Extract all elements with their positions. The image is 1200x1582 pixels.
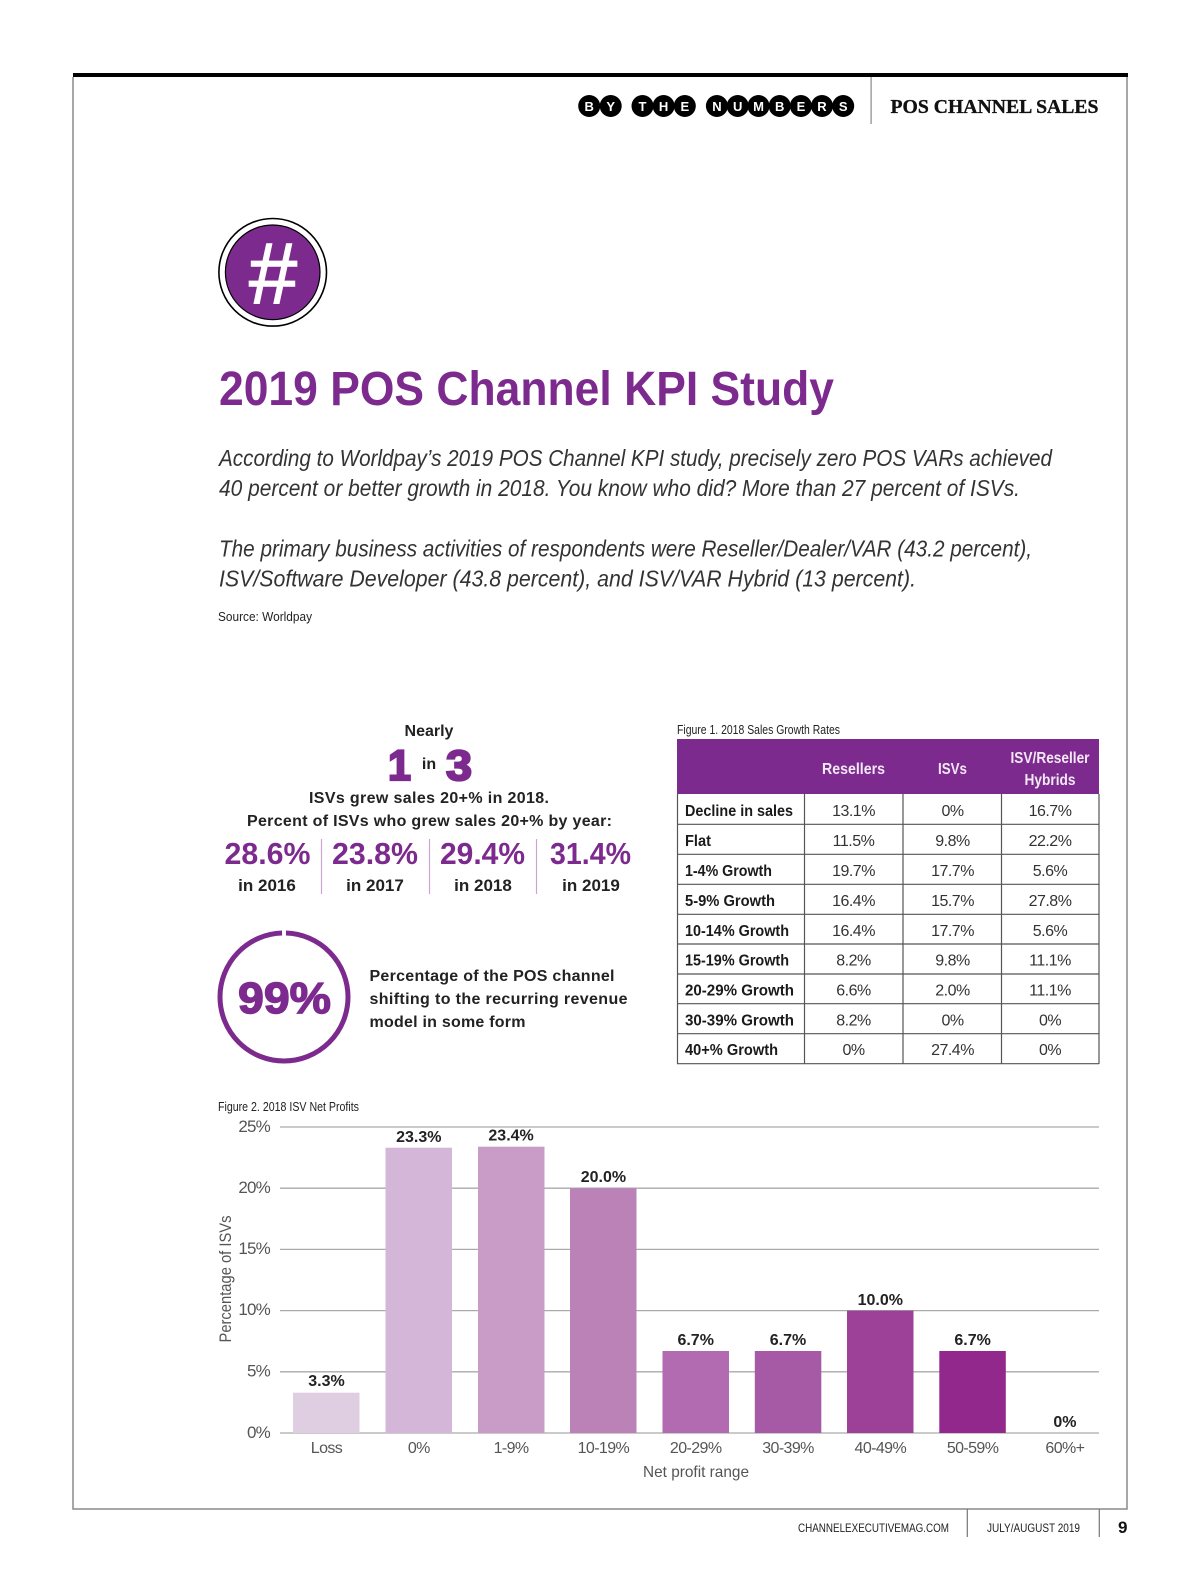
bar: 60%+: 60%+	[1045, 1440, 1085, 1457]
x axis title: Net profit range	[643, 1464, 749, 1481]
row: decline in sales	[685, 803, 1072, 820]
stat: 2016	[224, 836, 310, 895]
header: by the numbers badge row: H	[659, 99, 668, 114]
intro paragraph 2: ISV/Software Developer (43.8 percent), and ISV/VAR Hybrid (13 percent).	[219, 566, 916, 592]
row: 40+% growth: 0%	[842, 1042, 865, 1059]
bar: 10-19%: 20.0%	[581, 1169, 626, 1186]
table: sales growth rates	[677, 739, 1099, 1064]
text: ISV growth statement: Percent of ISVs who grew sales 20+% by year:	[247, 813, 612, 830]
row: 15-19% growth: 15-19% Growth	[685, 952, 789, 970]
bar: 1-9%: 1-9%	[494, 1440, 529, 1457]
header: by the numbers badge row: Y	[606, 99, 615, 114]
ring caption: shifting to the recurring revenue	[370, 991, 628, 1008]
intro paragraph 2: The primary business activities of respondents were Reseller/Dealer/VAR (43.2 percent),	[219, 536, 1032, 562]
row: 20-29% growth: 11.1%	[1029, 982, 1071, 1000]
header: by the numbers badge row: E	[680, 99, 689, 114]
panel: 99 percent ring stat	[220, 933, 628, 1061]
table header: Resellers	[822, 761, 885, 778]
row: 1-4% growth	[685, 863, 1068, 880]
table header: Hybrids	[1024, 772, 1076, 789]
stat: 2016: 28.6%	[224, 836, 310, 871]
bar: 10-19%: 10-19%	[578, 1440, 630, 1457]
bar: 60%+: 0%	[1053, 1414, 1076, 1431]
stat: 2017	[332, 836, 418, 895]
bar: 30-39%	[755, 1332, 821, 1457]
footer: page number: 9	[1118, 1518, 1127, 1537]
y axis labels: 5%	[247, 1362, 271, 1380]
row: decline in sales: Decline in sales	[685, 803, 793, 820]
bar: 20-29%	[662, 1332, 729, 1457]
bar: 0%: 23.3%	[396, 1129, 441, 1146]
y axis labels: 15%	[238, 1239, 271, 1258]
icon: hash badge	[219, 218, 326, 326]
footer: website: CHANNELEXECUTIVEMAG.COM	[798, 1521, 949, 1535]
bar: 50-59%	[939, 1332, 1006, 1457]
y axis labels	[238, 1117, 271, 1442]
y axis labels: 0%	[247, 1423, 271, 1442]
header: by the numbers badge row: B	[775, 99, 784, 114]
row: flat	[685, 833, 1072, 850]
bar: 40-49%: 40-49%	[855, 1440, 906, 1457]
panel: yearly percentages	[224, 836, 631, 895]
row: 5-9% growth: 5-9% Growth	[685, 893, 775, 910]
bar: 50-59%: 50-59%	[947, 1440, 999, 1457]
big stat: 1 in 3: in	[422, 756, 436, 773]
bar: 30-39%: 30-39%	[762, 1440, 814, 1457]
bar: 20-29%: 20-29%	[670, 1440, 722, 1457]
bar chart: ISV net profits	[216, 1117, 1099, 1481]
row: flat: 11.5%	[833, 833, 875, 850]
row: decline in sales: 13.1%	[832, 803, 875, 820]
bar: 40-49%	[847, 1292, 914, 1457]
row: 5-9% growth	[685, 893, 1072, 910]
header divider	[870, 77, 872, 124]
title: 2019 POS Channel KPI Study	[219, 363, 834, 416]
bar: 60%+	[1045, 1414, 1085, 1457]
row: 1-4% growth: 19.7%	[832, 863, 875, 880]
header: by the numbers badge row: B	[585, 99, 594, 114]
header: by the numbers badge row: T	[639, 99, 647, 114]
bar: loss	[293, 1373, 360, 1457]
stat: 2017: in 2017	[346, 876, 404, 895]
footer: issue date: JULY/AUGUST 2019	[987, 1521, 1080, 1535]
ring value: 99%	[238, 974, 331, 1023]
row: 10-14% growth: 17.7%	[931, 923, 974, 940]
header: by the numbers badge row: E	[797, 99, 806, 114]
panel: nearly 1 in 3 stat	[247, 723, 612, 830]
icon: hash badge: #	[249, 226, 297, 322]
row: 10-14% growth: 5.6%	[1033, 923, 1068, 940]
header: by the numbers badge row: S	[839, 99, 848, 114]
row: 1-4% growth: 17.7%	[931, 863, 974, 880]
intro paragraph 2	[219, 536, 1032, 592]
row: 15-19% growth: 11.1%	[1029, 952, 1071, 970]
stat: 2019: in 2019	[562, 876, 620, 895]
row: 20-29% growth: 6.6%	[836, 982, 871, 1000]
header: section name: POS CHANNEL SALES	[890, 96, 1098, 118]
y axis labels: 25%	[238, 1117, 271, 1136]
row: 1-4% growth: 1-4% Growth	[685, 863, 772, 880]
table header: ISVs	[938, 761, 967, 778]
header: by the numbers badge row: N	[712, 99, 722, 114]
ring caption	[370, 968, 628, 1031]
intro paragraph 1	[217, 445, 1053, 501]
row: 40+% growth	[685, 1042, 1061, 1059]
source note: Source: Worldpay	[218, 609, 312, 624]
figure 2 caption: Figure 2. 2018 ISV Net Profits	[218, 1099, 359, 1114]
bar: 40-49%: 10.0%	[858, 1292, 903, 1309]
bar: 30-39%: 6.7%	[770, 1332, 806, 1349]
row: 30-39% growth: 30-39% Growth	[685, 1012, 794, 1030]
row: 30-39% growth: 0%	[1039, 1012, 1061, 1030]
row: 30-39% growth: 8.2%	[836, 1012, 871, 1030]
stat: 2019: 31.4%	[550, 836, 631, 871]
row: decline in sales: 0%	[941, 803, 964, 820]
big stat: 1 in 3	[388, 742, 472, 790]
bar: 1-9%	[478, 1128, 544, 1457]
row: flat: 9.8%	[935, 833, 970, 850]
row: 15-19% growth: 9.8%	[935, 952, 970, 970]
figure 1 caption: Figure 1. 2018 Sales Growth Rates	[677, 722, 840, 737]
page frame	[73, 73, 1128, 1509]
table header: ISV/Reseller	[1010, 750, 1090, 767]
row: 40+% growth: 0%	[1039, 1042, 1061, 1059]
row: flat: Flat	[685, 833, 712, 850]
header: by the numbers badge row: M	[753, 99, 764, 114]
stat: 2018: 29.4%	[440, 836, 525, 871]
row: 40+% growth: 27.4%	[931, 1042, 974, 1059]
bar: 0%: 0%	[408, 1440, 430, 1457]
bar: 0%	[386, 1129, 452, 1457]
intro paragraph 1: According to Worldpay’s 2019 POS Channel KPI study, precisely zero POS VARs achieved	[217, 445, 1053, 471]
row: 5-9% growth: 16.4%	[832, 893, 875, 910]
bar: 10-19%	[570, 1169, 636, 1457]
ring caption: model in some form	[370, 1014, 526, 1031]
bar: loss: Loss	[311, 1440, 343, 1457]
row: 30-39% growth	[685, 1012, 1061, 1030]
ring chart	[220, 933, 348, 1061]
bar: 50-59%: 6.7%	[954, 1332, 991, 1349]
row: flat: 22.2%	[1029, 833, 1072, 850]
text: ISV growth statement: ISVs grew sales 20+% in 2018.	[309, 790, 549, 807]
row: 30-39% growth: 0%	[941, 1012, 964, 1030]
ring caption: Percentage of the POS channel	[370, 968, 614, 985]
row: 1-4% growth: 5.6%	[1033, 863, 1068, 880]
header: by the numbers badge row: U	[733, 99, 742, 114]
header: by the numbers badge row: R	[817, 99, 827, 114]
row: 10-14% growth: 10-14% Growth	[685, 923, 789, 940]
bar: 1-9%: 23.4%	[488, 1128, 534, 1145]
row: 10-14% growth: 16.4%	[832, 923, 875, 940]
y axis title: Percentage of ISVs	[216, 1216, 235, 1342]
row: 40+% growth: 40+% Growth	[685, 1042, 778, 1059]
big stat: 1 in 3: 3	[446, 742, 472, 790]
row: 15-19% growth	[685, 952, 1071, 970]
row: 5-9% growth: 27.8%	[1029, 893, 1072, 910]
footer	[798, 1509, 1127, 1537]
stat: 2018: in 2018	[454, 876, 512, 895]
stat: 2018	[440, 836, 525, 895]
text: ISV growth statement	[247, 790, 612, 830]
row: 5-9% growth: 15.7%	[931, 893, 974, 910]
row: decline in sales: 16.7%	[1029, 803, 1072, 820]
stat: 2016: in 2016	[238, 876, 296, 895]
row: 20-29% growth	[685, 982, 1071, 1000]
row: 20-29% growth: 2.0%	[935, 982, 970, 1000]
intro paragraph 1: 40 percent or better growth in 2018. You know who did? More than 27 percent of ISVs.	[219, 475, 1020, 501]
row: 10-14% growth	[685, 923, 1068, 940]
bar: loss: 3.3%	[308, 1373, 345, 1390]
header: by the numbers badge row	[578, 95, 854, 117]
y axis labels: 20%	[238, 1178, 271, 1197]
text: nearly: Nearly	[405, 723, 454, 740]
row: 20-29% growth: 20-29% Growth	[685, 982, 794, 1000]
table header	[677, 739, 1099, 794]
big stat: 1 in 3: 1	[388, 742, 411, 790]
row: 15-19% growth: 8.2%	[836, 952, 871, 970]
stat: 2017: 23.8%	[332, 836, 418, 871]
bar: 20-29%: 6.7%	[677, 1332, 714, 1349]
stat: 2019	[550, 836, 631, 895]
y axis labels: 10%	[238, 1300, 271, 1319]
